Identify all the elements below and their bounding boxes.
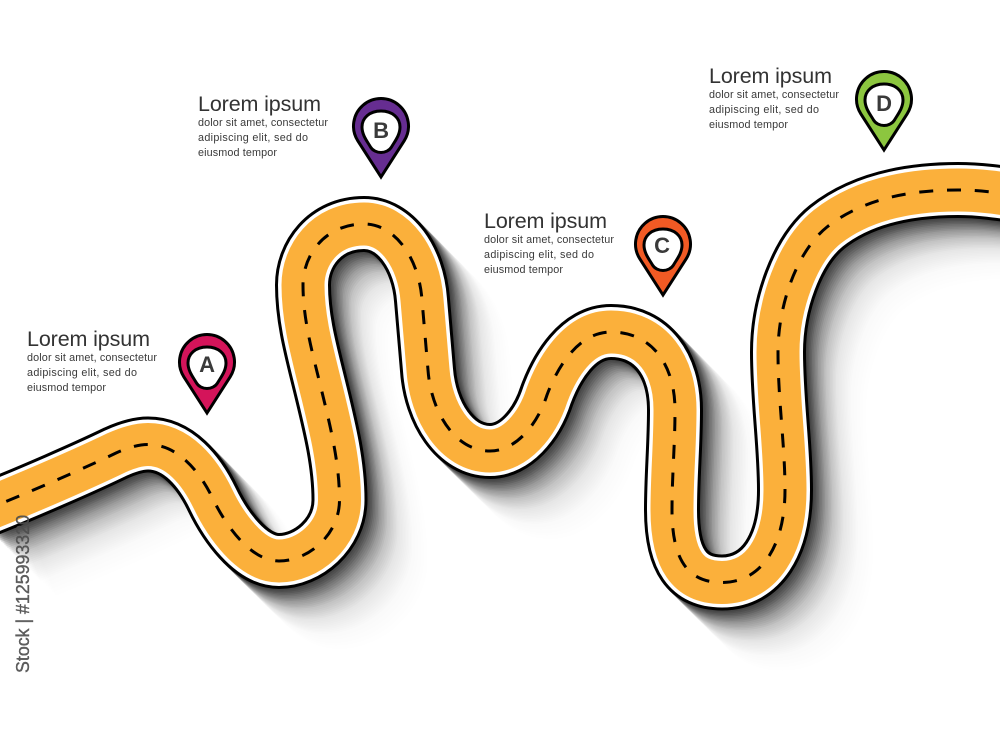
milestone D [709, 64, 912, 150]
body A line 2: adipiscing elit, sed do [27, 367, 137, 379]
heading C: Lorem ipsum [484, 209, 607, 233]
icon: map pin B [354, 99, 408, 177]
body C line 3: eiusmod tempor [484, 264, 563, 276]
road long shadow [0, 192, 1000, 642]
text block B [198, 92, 328, 159]
road black outline [0, 190, 1000, 582]
milestone C [484, 209, 690, 295]
icon: map pin A: A [199, 352, 215, 377]
body C line 1: dolor sit amet, consectetur [484, 234, 614, 246]
icon: map pin D [856, 72, 912, 150]
icon: map pin C [636, 217, 690, 295]
road white edge line [0, 190, 1000, 582]
body B line 3: eiusmod tempor [198, 147, 277, 159]
body A line 1: dolor sit amet, consectetur [27, 352, 157, 364]
body D line 1: dolor sit amet, consectetur [709, 89, 839, 101]
body B line 2: adipiscing elit, sed do [198, 132, 308, 144]
body C line 2: adipiscing elit, sed do [484, 249, 594, 261]
road dashed centre line [0, 190, 1000, 582]
heading D: Lorem ipsum [709, 64, 832, 88]
road orange surface [0, 190, 1000, 582]
body B line 1: dolor sit amet, consectetur [198, 117, 328, 129]
icon: map pin C: C [654, 233, 670, 258]
text block C [484, 209, 614, 276]
winding road [0, 190, 1000, 582]
text block D [709, 64, 839, 131]
body D line 3: eiusmod tempor [709, 119, 788, 131]
icon: map pin B: B [373, 118, 389, 143]
milestone B [198, 92, 408, 177]
icon: map pin A [180, 335, 234, 413]
vertical image id label: Stock | #125993320 [13, 515, 33, 673]
heading B: Lorem ipsum [198, 92, 321, 116]
milestone A [27, 327, 234, 413]
text block A [27, 327, 157, 394]
heading A: Lorem ipsum [27, 327, 150, 351]
body D line 2: adipiscing elit, sed do [709, 104, 819, 116]
icon: map pin D: D [876, 91, 892, 116]
body A line 3: eiusmod tempor [27, 382, 106, 394]
